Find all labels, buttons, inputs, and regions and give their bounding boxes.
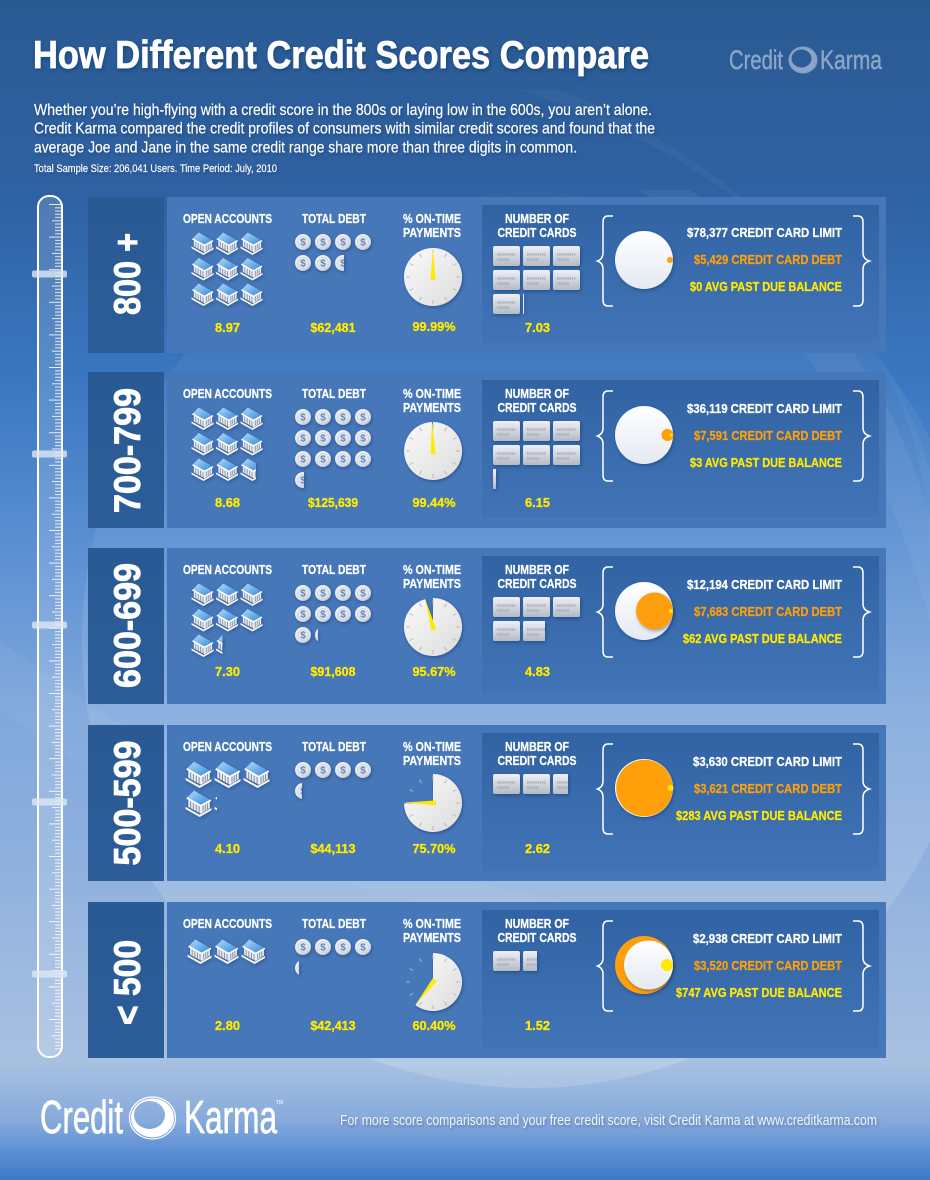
logo: Credit Karma header xyxy=(729,45,883,75)
intro text xyxy=(34,102,655,175)
credit summary 800+: $0 AVG PAST DUE BALANCE xyxy=(690,279,842,294)
credit summary 500-599: $283 AVG PAST DUE BALANCE xyxy=(676,808,842,823)
number of credit cards 4.83: NUMBER OF xyxy=(505,563,569,577)
logo: Credit Karma footer: Credit xyxy=(40,1091,123,1143)
open accounts 8.97 xyxy=(183,212,272,335)
number of credit cards 6.15: 6.15 xyxy=(525,495,550,510)
on-time payments 60.40%: PAYMENTS xyxy=(403,931,461,945)
ruler scale xyxy=(32,196,67,1057)
credit summary 500-599: $3,630 CREDIT CARD LIMIT xyxy=(693,754,842,769)
panel 800+ xyxy=(167,197,886,353)
panel under 500 xyxy=(167,902,886,1058)
number of credit cards 4.83 xyxy=(493,563,580,679)
on-time payments 99.99%: 99.99% xyxy=(412,319,456,334)
score tab 800+: 800 + xyxy=(107,233,148,315)
total debt $125,639: $125,639 xyxy=(308,495,358,510)
intro text: Whether you’re high-flying with a credit score in the 800s or laying low in the 600s, you aren’t alone. xyxy=(34,102,652,119)
score tab 500-599: 500-599 xyxy=(107,740,148,866)
credit summary 500-599 xyxy=(598,744,870,834)
credit summary 500-599: $3,621 CREDIT CARD DEBT xyxy=(694,781,842,796)
number of credit cards 2.62: 2.62 xyxy=(525,841,550,856)
intro text: average Joe and Jane in the same credit range share more than three digits in common. xyxy=(34,140,577,156)
credit summary under 500: $2,938 CREDIT CARD LIMIT xyxy=(693,931,842,946)
credit summary 600-699: $12,194 CREDIT CARD LIMIT xyxy=(687,577,842,592)
total debt $42,413 xyxy=(295,917,371,1033)
row: 500-599 xyxy=(88,725,886,881)
total debt $62,481: $62,481 xyxy=(310,320,356,335)
intro text: Total Sample Size: 206,041 Users. Time Period: July, 2010 xyxy=(34,163,277,175)
title: How Different Credit Scores Compare xyxy=(33,34,649,77)
number of credit cards 2.62: NUMBER OF xyxy=(505,740,569,754)
number of credit cards 1.52 xyxy=(493,917,576,1033)
total debt $125,639: TOTAL DEBT xyxy=(302,387,366,401)
open accounts 8.97: 8.97 xyxy=(215,320,240,335)
open accounts 2.80: 2.80 xyxy=(215,1018,240,1033)
credit summary 700-799: $7,591 CREDIT CARD DEBT xyxy=(694,428,842,443)
total debt $42,413: TOTAL DEBT xyxy=(302,917,366,931)
number of credit cards 1.52: NUMBER OF xyxy=(505,917,569,931)
on-time payments 95.67% xyxy=(403,563,462,679)
row: 600-699 xyxy=(88,548,886,704)
logo: Credit Karma header: Karma xyxy=(820,45,883,75)
score tab 500-599 xyxy=(88,725,164,881)
open accounts 4.10: OPEN ACCOUNTS xyxy=(183,740,272,754)
number of credit cards 1.52: CREDIT CARDS xyxy=(498,931,576,945)
on-time payments 75.70%: % ON-TIME xyxy=(403,740,461,754)
score tab under 500 xyxy=(88,902,164,1058)
score tab 700-799: 700-799 xyxy=(107,388,148,513)
open accounts 2.80 xyxy=(183,917,272,1033)
on-time payments 99.99% xyxy=(403,212,462,334)
panel 700-799 xyxy=(167,372,886,528)
on-time payments 75.70%: 75.70% xyxy=(412,841,456,856)
on-time payments 99.99%: % ON-TIME xyxy=(403,212,461,226)
open accounts 8.97: OPEN ACCOUNTS xyxy=(183,212,272,226)
total debt $44,113: TOTAL DEBT xyxy=(302,740,366,754)
total debt $91,608: TOTAL DEBT xyxy=(302,563,366,577)
row: 800+ xyxy=(88,197,886,353)
open accounts 2.80: OPEN ACCOUNTS xyxy=(183,917,272,931)
total debt $91,608: $91,608 xyxy=(310,664,356,679)
logo: Credit Karma header: Credit xyxy=(729,45,783,75)
on-time payments 99.99%: PAYMENTS xyxy=(403,226,461,240)
logo: Credit Karma footer xyxy=(40,1091,283,1143)
open accounts 8.68: 8.68 xyxy=(215,495,240,510)
credit summary under 500 xyxy=(598,921,870,1011)
number of credit cards 6.15: CREDIT CARDS xyxy=(498,401,576,415)
credit summary 800+ xyxy=(598,216,870,306)
open accounts 4.10: 4.10 xyxy=(215,841,240,856)
total debt $44,113 xyxy=(295,740,371,856)
on-time payments 60.40%: % ON-TIME xyxy=(403,917,461,931)
number of credit cards 4.83: CREDIT CARDS xyxy=(498,577,576,591)
on-time payments 99.44% xyxy=(403,387,462,510)
credit summary 600-699: $7,683 CREDIT CARD DEBT xyxy=(694,604,842,619)
on-time payments 95.67%: PAYMENTS xyxy=(403,577,461,591)
number of credit cards 6.15 xyxy=(493,387,580,510)
total debt $62,481: TOTAL DEBT xyxy=(302,212,366,226)
row: 700-799 xyxy=(88,372,886,528)
total debt $42,413: $42,413 xyxy=(310,1018,356,1033)
number of credit cards 2.62: CREDIT CARDS xyxy=(498,754,576,768)
total debt $44,113: $44,113 xyxy=(310,841,356,856)
score tab 800+ xyxy=(88,197,164,353)
number of credit cards 7.03: NUMBER OF xyxy=(505,212,569,226)
score tab 600-699: 600-699 xyxy=(107,563,148,688)
open accounts 4.10 xyxy=(183,740,272,856)
total debt $125,639 xyxy=(295,387,371,510)
credit summary 700-799: $36,119 CREDIT CARD LIMIT xyxy=(687,401,842,416)
on-time payments 95.67%: 95.67% xyxy=(412,664,456,679)
number of credit cards 7.03 xyxy=(493,212,580,335)
on-time payments 99.44%: % ON-TIME xyxy=(403,387,461,401)
on-time payments 60.40%: 60.40% xyxy=(412,1018,456,1033)
credit summary 700-799: $3 AVG PAST DUE BALANCE xyxy=(690,455,842,470)
number of credit cards 4.83: 4.83 xyxy=(525,664,550,679)
credit summary 700-799 xyxy=(598,391,870,481)
credit summary 800+: $78,377 CREDIT CARD LIMIT xyxy=(687,225,842,240)
credit summary 800+: $5,429 CREDIT CARD DEBT xyxy=(694,252,842,267)
number of credit cards 1.52: 1.52 xyxy=(525,1018,550,1033)
panel 500-599 xyxy=(167,725,886,881)
credit summary 600-699 xyxy=(598,567,870,657)
number of credit cards 2.62 xyxy=(493,740,580,856)
intro text: Credit Karma compared the credit profiles of consumers with similar credit scores and found that the xyxy=(34,120,655,138)
open accounts 7.30: 7.30 xyxy=(215,664,240,679)
on-time payments 99.44%: PAYMENTS xyxy=(403,401,461,415)
on-time payments 75.70% xyxy=(403,740,462,856)
score tab 600-699 xyxy=(88,548,164,704)
row: under 500 xyxy=(88,902,886,1058)
number of credit cards 6.15: NUMBER OF xyxy=(505,387,569,401)
open accounts 8.68: OPEN ACCOUNTS xyxy=(183,387,272,401)
score tab 700-799 xyxy=(88,372,164,528)
panel 600-699 xyxy=(167,548,886,704)
logo: Credit Karma footer: Karma xyxy=(184,1091,277,1143)
on-time payments 75.70%: PAYMENTS xyxy=(403,754,461,768)
total debt $62,481 xyxy=(295,212,371,335)
logo: Credit Karma footer: TM xyxy=(276,1100,283,1106)
credit summary 600-699: $62 AVG PAST DUE BALANCE xyxy=(683,631,842,646)
on-time payments 99.44%: 99.44% xyxy=(412,495,456,510)
on-time payments 95.67%: % ON-TIME xyxy=(403,563,461,577)
on-time payments 60.40% xyxy=(403,917,462,1033)
credit summary under 500: $3,520 CREDIT CARD DEBT xyxy=(694,958,842,973)
number of credit cards 7.03: CREDIT CARDS xyxy=(498,226,576,240)
score tab under 500: < 500 xyxy=(107,940,148,1025)
credit summary under 500: $747 AVG PAST DUE BALANCE xyxy=(676,985,842,1000)
open accounts 7.30 xyxy=(183,563,272,679)
open accounts 7.30: OPEN ACCOUNTS xyxy=(183,563,272,577)
total debt $91,608 xyxy=(295,563,371,679)
open accounts 8.68 xyxy=(183,387,272,510)
number of credit cards 7.03: 7.03 xyxy=(525,320,550,335)
